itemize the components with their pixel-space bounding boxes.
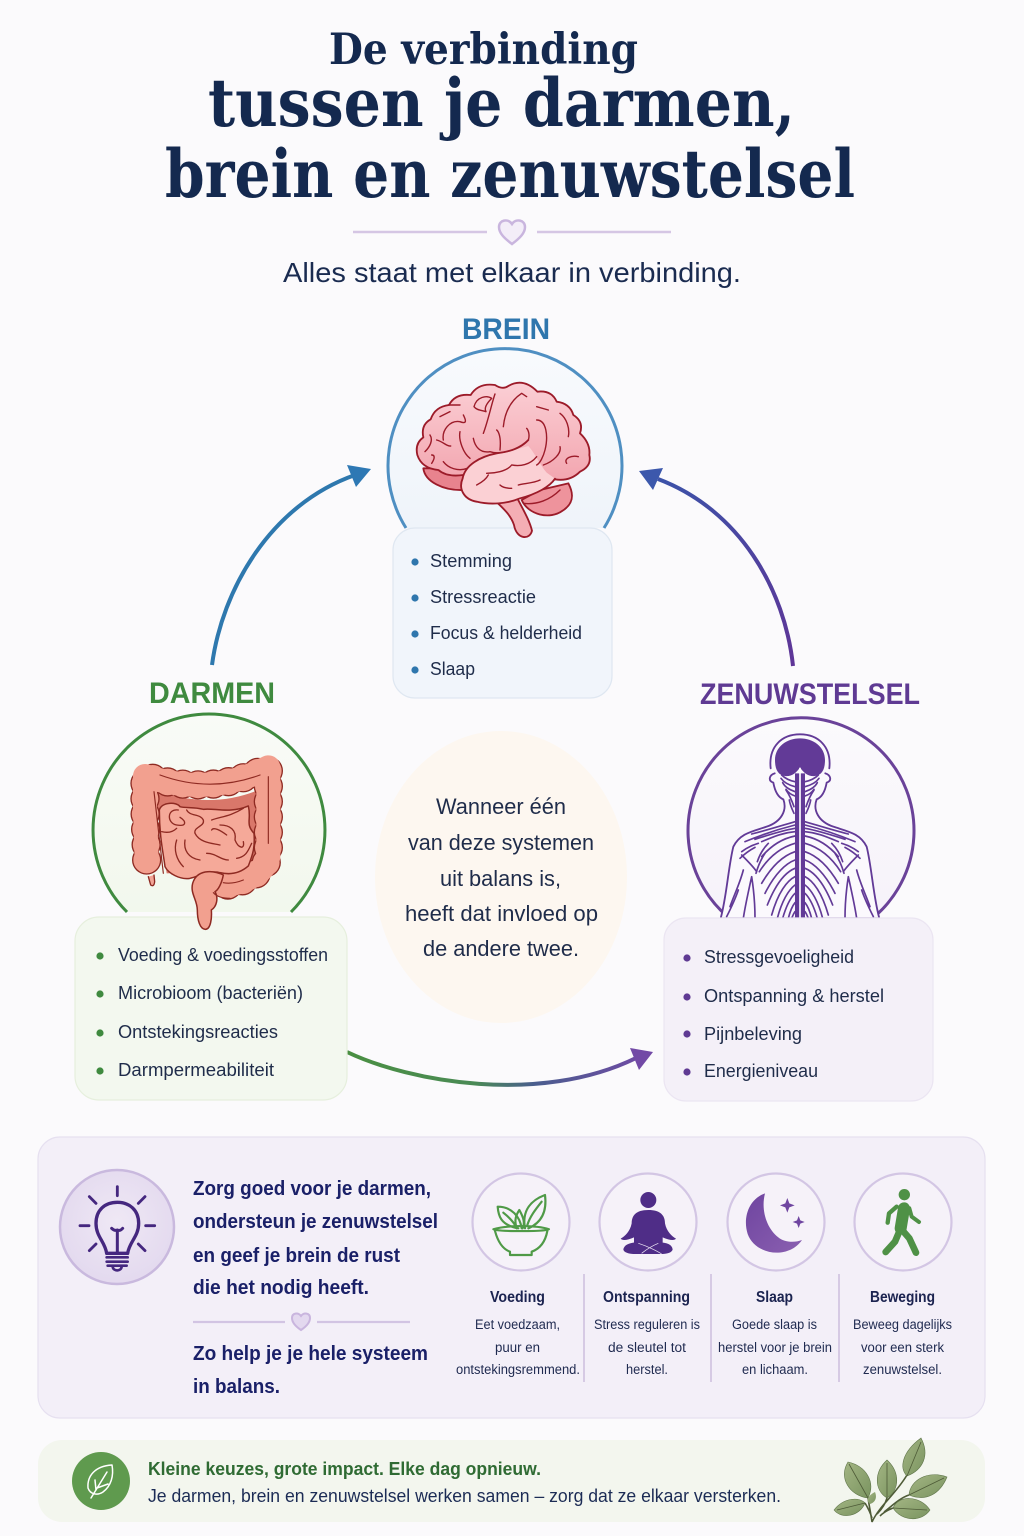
item: ontspanning: Ontspanning (603, 1289, 690, 1306)
footer text: Je darmen, brein en zenuwstelsel werken samen – zorg dat ze elkaar versterken. (148, 1486, 781, 1506)
footer text (148, 1459, 781, 1506)
center callout: Wanneer één (436, 794, 566, 819)
item: voeding (456, 1174, 580, 1377)
panel: zenuwstelsel (664, 678, 933, 1101)
brein circle (388, 349, 622, 528)
advice text: en geef je brein de rust (193, 1245, 400, 1267)
zenuwstelsel list card: Ontspanning & herstel (704, 986, 884, 1006)
icon: intestines (145, 767, 268, 929)
item: beweging: zenuwstelsel. (863, 1362, 942, 1377)
item: ontspanning (594, 1174, 700, 1377)
icon: bowl with leaves (493, 1195, 549, 1255)
center callout: heeft dat invloed op (405, 901, 598, 926)
center callout (375, 731, 627, 1023)
advice text (193, 1178, 438, 1398)
darmen list card (75, 917, 347, 1100)
footer background (38, 1440, 985, 1522)
panel: advice (38, 1137, 985, 1418)
item: voeding: Voeding (490, 1289, 545, 1306)
item: voeding: Eet voedzaam, (475, 1317, 560, 1332)
title: brein en zenuwstelsel (165, 135, 855, 213)
advice text: in balans. (193, 1376, 280, 1398)
subtitle: Alles staat met elkaar in verbinding. (283, 257, 741, 288)
advice text: ondersteun je zenuwstelsel (193, 1211, 438, 1233)
heading: zenuwstelsel: ZENUWSTELSEL (700, 678, 920, 711)
center callout: uit balans is, (440, 866, 561, 891)
item: slaap: herstel voor je brein (718, 1340, 832, 1355)
item: ontspanning: herstel. (626, 1362, 668, 1377)
panel: darmen (75, 677, 347, 1100)
title (165, 25, 855, 213)
title: tussen je darmen, (208, 64, 795, 142)
heading: darmen: DARMEN (149, 677, 275, 710)
title: De verbinding (329, 25, 638, 75)
zenuwstelsel list card (664, 918, 933, 1101)
zenuwstelsel circle (688, 718, 914, 917)
brein list card (393, 528, 612, 698)
brein list card: Focus & helderheid (430, 623, 582, 643)
icon: plant sprig (834, 1438, 947, 1522)
item: ontspanning: de sleutel tot (608, 1340, 686, 1355)
darmen list card: Microbioom (bacteriën) (118, 983, 303, 1003)
arrow: darmen to zenuwstelsel (347, 1048, 653, 1085)
item: beweging: Beweging (870, 1289, 935, 1306)
darmen circle (93, 714, 325, 912)
item: slaap: Slaap (756, 1289, 793, 1306)
advice text: Zorg goed voor je darmen, (193, 1178, 431, 1200)
panel: brein (388, 313, 622, 698)
icon: nervous system figure (721, 734, 879, 918)
item: ontspanning: Stress reguleren is (594, 1317, 700, 1332)
item: slaap (718, 1174, 832, 1377)
arrow: zenuwstelsel to brein (639, 468, 793, 666)
brein list card: Stemming (430, 551, 512, 571)
icon: lightbulb (60, 1170, 174, 1284)
icon: brain (417, 383, 590, 537)
icon: meditating figure (621, 1192, 676, 1254)
footer text: Kleine keuzes, grote impact. Elke dag opnieuw. (148, 1459, 541, 1479)
zenuwstelsel list card: Energieniveau (704, 1061, 818, 1081)
darmen list card: Ontstekingsreacties (118, 1022, 278, 1042)
title divider with heart (353, 220, 671, 244)
heading: brein: BREIN (462, 313, 550, 346)
advice background (38, 1137, 985, 1418)
darmen list card: Voeding & voedingsstoffen (118, 945, 328, 965)
brein list card: Stressreactie (430, 587, 536, 607)
center callout: de andere twee. (423, 936, 579, 961)
item: beweging (853, 1174, 952, 1377)
center callout: van deze systemen (408, 830, 594, 855)
brein list card: Slaap (430, 659, 475, 679)
icon: walking figure (886, 1189, 919, 1253)
item: slaap: Goede slaap is (732, 1317, 817, 1332)
zenuwstelsel list card: Stressgevoeligheid (704, 947, 854, 967)
advice text: Zo help je je hele systeem (193, 1343, 428, 1365)
item: beweging: voor een sterk (861, 1340, 944, 1355)
item: voeding: ontstekingsremmend. (456, 1362, 580, 1377)
zenuwstelsel list card: Pijnbeleving (704, 1024, 802, 1044)
panel: footer (38, 1438, 985, 1522)
icon: leaf badge (72, 1452, 130, 1510)
item: voeding: puur en (495, 1340, 540, 1355)
icon: moon and stars (746, 1193, 805, 1253)
item: beweging: Beweeg dagelijks (853, 1317, 952, 1332)
darmen list card: Darmpermeabiliteit (118, 1060, 274, 1080)
arrow: darmen to brein (212, 465, 371, 665)
advice text: die het nodig heeft. (193, 1277, 369, 1299)
item: slaap: en lichaam. (742, 1362, 808, 1377)
